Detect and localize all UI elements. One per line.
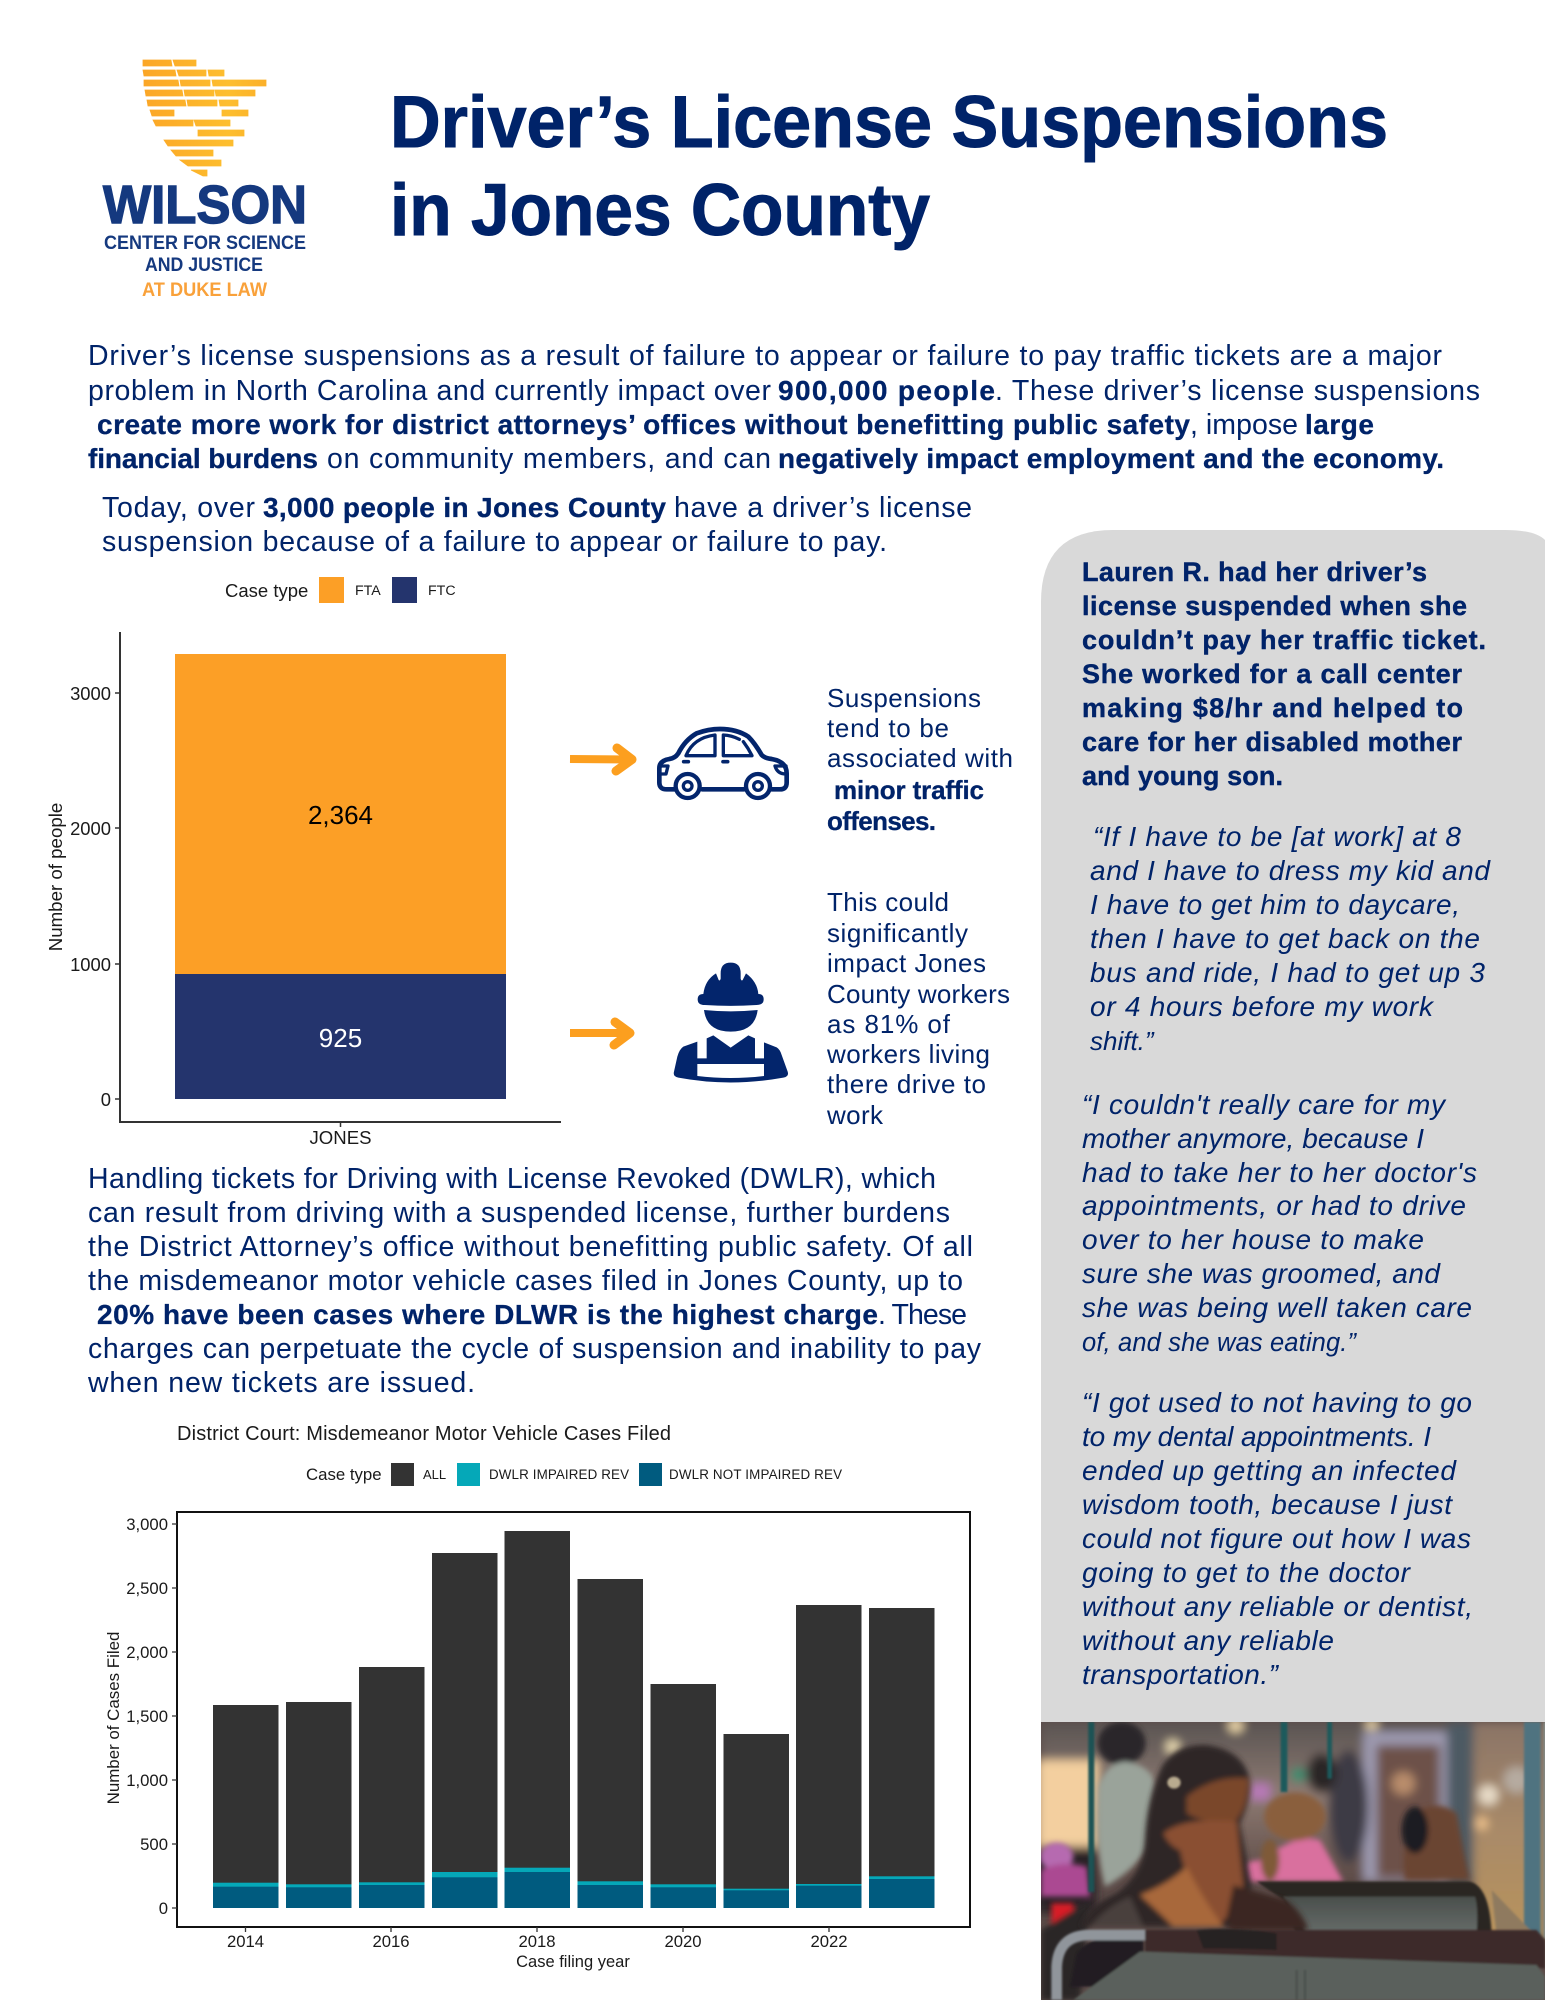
legend: [225, 577, 456, 603]
quote 3: “I got used to not having to go: [1082, 1387, 1472, 1418]
car caption: [827, 683, 1013, 836]
car caption: minor traffic: [834, 775, 984, 805]
logo: AT DUKE LAW: [142, 279, 268, 301]
icon: car: [659, 729, 787, 798]
plot frame and axes: 2020: [664, 1932, 702, 1951]
axes: 3000: [70, 683, 111, 704]
intro paragraph: 900,000 people: [778, 375, 995, 406]
plot frame and axes: 2,500: [126, 1579, 168, 1598]
DWLR paragraph: when new tickets are issued.: [87, 1367, 475, 1399]
plot frame and axes: 2014: [227, 1932, 264, 1951]
plot frame and axes: 2,000: [126, 1643, 168, 1662]
quote 1: or 4 hours before my work: [1090, 991, 1435, 1022]
story heading: license suspended when she: [1082, 591, 1467, 621]
legend: ALL: [423, 1467, 446, 1482]
worker caption: as 81% of: [827, 1009, 951, 1039]
story heading: and young son.: [1082, 761, 1283, 791]
story heading: [1082, 557, 1486, 791]
legend: FTC: [428, 583, 456, 599]
quote 1: then I have to get back on the: [1090, 923, 1480, 954]
title: in Jones County: [390, 170, 930, 251]
bars: 925: [319, 1023, 362, 1053]
chart title: District Court: Misdemeanor Motor Vehicle Cases Filed: [177, 1423, 671, 1445]
plot frame and axes: 500: [140, 1835, 168, 1854]
quote 3: [1082, 1387, 1473, 1690]
quote 2: she was being well taken care: [1082, 1292, 1472, 1323]
stacked bar chart: suspensions by case type: [45, 577, 561, 1148]
DWLR paragraph: the District Attorney’s office without benefitting public safety. Of all: [88, 1231, 973, 1263]
panel: Lauren R. story: [1041, 530, 1545, 1724]
bar chart: misdemeanor motor vehicle cases filed: [104, 1423, 970, 1971]
photo: woman seated on a bus at dusk: [1037, 1718, 1545, 2000]
arrow to worker: [570, 1022, 630, 1045]
bars: [175, 654, 506, 1099]
title: Driver’s License Suspensions: [390, 82, 1388, 163]
title: [390, 82, 1388, 251]
car caption: associated with: [827, 743, 1013, 773]
plot frame and axes: 2022: [810, 1932, 848, 1951]
car caption: Suspensions: [827, 683, 981, 713]
quote 3: transportation.”: [1082, 1659, 1280, 1690]
intro paragraph: negatively impact employment and the economy.: [778, 443, 1444, 474]
quote 1: [1090, 821, 1491, 1056]
quote 3: could not figure out how I was: [1082, 1523, 1471, 1554]
plot frame and axes: 2018: [518, 1932, 556, 1951]
worker caption: work: [826, 1100, 884, 1130]
intro paragraph: large: [1305, 409, 1374, 440]
plot frame and axes: 0: [159, 1899, 168, 1918]
quote 2: appointments, or had to drive: [1082, 1190, 1466, 1221]
logo: AND JUSTICE: [145, 254, 263, 276]
car caption: tend to be: [827, 713, 949, 743]
axes: 2000: [70, 818, 111, 839]
quote 3: going to get to the doctor: [1082, 1557, 1412, 1588]
Jones County paragraph: suspension because of a failure to appear or failure to pay.: [102, 526, 887, 558]
bars 2014-2023: [213, 1531, 934, 1908]
intro paragraph: [88, 340, 1480, 475]
worker caption: significantly: [827, 918, 968, 948]
quote 2: over to her house to make: [1082, 1224, 1424, 1255]
worker caption: workers living: [826, 1039, 990, 1069]
plot frame and axes: Number of Cases Filed: [104, 1632, 123, 1804]
quote 3: without any reliable or dentist,: [1082, 1591, 1473, 1622]
plot frame and axes: 1,500: [126, 1707, 168, 1726]
quote 1: bus and ride, I had to get up 3: [1090, 957, 1485, 988]
quote 3: wisdom tooth, because I just: [1082, 1489, 1453, 1520]
intro paragraph: . These driver’s license suspensions: [995, 375, 1480, 407]
worker caption: [826, 887, 1010, 1130]
intro paragraph: , impose: [1190, 409, 1298, 441]
plot frame and axes: Case filing year: [516, 1953, 630, 1971]
intro paragraph: problem in North Carolina and currently impact over: [88, 375, 772, 407]
quote 2: sure she was groomed, and: [1082, 1258, 1441, 1289]
DWLR paragraph: 20% have been cases where DLWR is the highest charge: [97, 1299, 878, 1330]
axes: [45, 632, 561, 1148]
quote 1: and I have to dress my kid and: [1090, 855, 1491, 886]
DWLR paragraph: charges can perpetuate the cycle of suspension and inability to pay: [88, 1333, 982, 1365]
Jones County paragraph: Today, over: [102, 492, 256, 524]
worker caption: County workers: [827, 979, 1010, 1009]
quote 3: ended up getting an infected: [1082, 1455, 1457, 1486]
story heading: couldn’t pay her traffic ticket.: [1082, 625, 1486, 655]
axes: 1000: [70, 954, 111, 975]
worker caption: there drive to: [827, 1069, 986, 1099]
worker caption: This could: [827, 887, 949, 917]
logo: [103, 60, 307, 301]
story heading: Lauren R. had her driver’s: [1082, 557, 1427, 587]
car caption: offenses.: [827, 806, 936, 836]
logo mark: stacked gold bars: [143, 60, 266, 176]
legend: Case type: [225, 580, 308, 601]
quote 2: mother anymore, because I: [1082, 1123, 1424, 1154]
story heading: care for her disabled mother: [1082, 727, 1462, 757]
DWLR paragraph: [87, 1163, 982, 1399]
worker caption: impact Jones: [827, 948, 986, 978]
legend: DWLR IMPAIRED REV: [489, 1467, 629, 1482]
quote 3: without any reliable: [1082, 1625, 1334, 1656]
quote 1: “If I have to be [at work] at 8: [1093, 821, 1461, 852]
quote 1: I have to get him to daycare,: [1090, 889, 1460, 920]
DWLR paragraph: the misdemeanor motor vehicle cases filed in Jones County, up to: [88, 1265, 963, 1297]
Jones County paragraph: 3,000 people in Jones County: [263, 492, 666, 523]
bars: 2,364: [308, 800, 373, 830]
Jones County paragraph: [102, 492, 972, 558]
plot frame and axes: 1,000: [126, 1771, 168, 1790]
intro paragraph: Driver’s license suspensions as a result of failure to appear or failure to pay traffic tickets are a major: [88, 340, 1443, 372]
legend: [306, 1463, 842, 1486]
Jones County paragraph: have a driver’s license: [674, 492, 972, 524]
quote 2: [1082, 1089, 1477, 1357]
arrow to car: [570, 748, 632, 771]
quote 2: “I couldn't really care for my: [1082, 1089, 1447, 1120]
quote 3: to my dental appointments. I: [1082, 1421, 1431, 1452]
quote 2: of, and she was eating.”: [1082, 1329, 1358, 1357]
axes: 0: [101, 1089, 111, 1110]
panel background: [1041, 530, 1545, 1724]
quote 2: had to take her to her doctor's: [1082, 1157, 1477, 1188]
plot frame and axes: 2016: [372, 1932, 410, 1951]
intro paragraph: financial burdens: [88, 443, 318, 474]
DWLR paragraph: . These: [878, 1299, 967, 1331]
intro paragraph: create more work for district attorneys’ offices without benefitting public safety: [97, 409, 1190, 440]
plot frame and axes: 3,000: [126, 1515, 168, 1534]
icon: construction worker: [674, 963, 788, 1082]
logo: CENTER FOR SCIENCE: [104, 232, 306, 254]
legend: DWLR NOT IMPAIRED REV: [669, 1467, 842, 1482]
logo wordmark: WILSON: [103, 175, 307, 235]
axes: JONES: [310, 1127, 372, 1148]
story heading: She worked for a call center: [1082, 659, 1462, 689]
DWLR paragraph: can result from driving with a suspended license, further burdens: [88, 1197, 950, 1229]
quote 1: shift.”: [1090, 1026, 1155, 1056]
legend: FTA: [355, 583, 381, 599]
legend: Case type: [306, 1465, 382, 1484]
axes: Number of people: [45, 803, 66, 951]
DWLR paragraph: Handling tickets for Driving with License Revoked (DWLR), which: [88, 1163, 936, 1195]
intro paragraph: on community members, and can: [327, 443, 771, 475]
story heading: making $8/hr and helped to: [1082, 693, 1463, 723]
plot frame and axes: [104, 1512, 970, 1971]
